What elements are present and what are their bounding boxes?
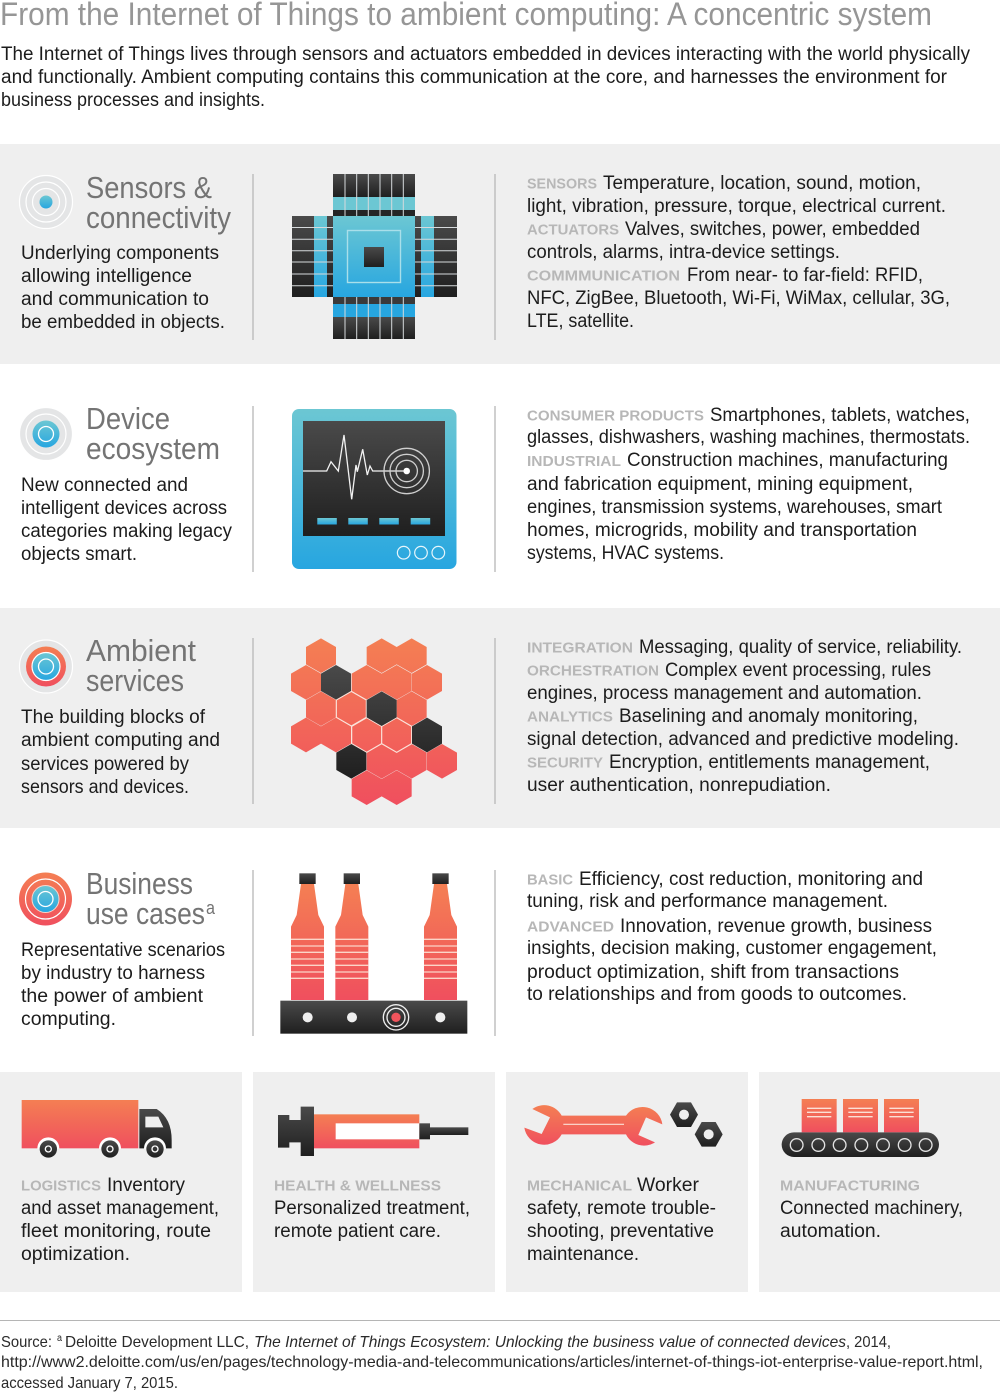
text: logistics: Inventory xyxy=(107,1175,185,1196)
heading: ambient services xyxy=(86,633,196,698)
heading: sensors and connectivity: connectivity xyxy=(86,200,231,235)
heading: business use cases: use cases xyxy=(86,896,205,931)
description: sensors: allowing intelligence xyxy=(21,266,192,287)
heading: ambient services: services xyxy=(86,663,184,698)
details: device: INDUSTRIAL xyxy=(527,454,621,470)
description: device: objects smart. xyxy=(21,544,137,565)
details: business: tuning, risk and performance management. xyxy=(527,891,888,912)
panel: sensors and connectivity xyxy=(0,144,1000,364)
heading: device ecosystem: ecosystem xyxy=(86,431,220,466)
icon: hexagon cluster xyxy=(291,638,457,805)
details: ambient: engines, process management and automation. xyxy=(527,683,922,704)
details: sensors: SENSORS xyxy=(527,176,597,192)
heading: device ecosystem xyxy=(86,401,220,466)
description: device: categories making legacy xyxy=(21,521,232,542)
icon: bottles on conveyor xyxy=(280,873,467,1034)
text: mechanical: maintenance. xyxy=(527,1244,639,1265)
details: ambient: ANALYTICS xyxy=(527,710,613,726)
details: sensors: light, vibration, pressure, torque, electrical current. xyxy=(527,196,946,217)
details: ambient: SECURITY xyxy=(527,756,603,772)
description: sensors: and communication to xyxy=(21,289,209,310)
icon: device rings xyxy=(20,408,72,460)
description: business: the power of ambient xyxy=(21,986,204,1007)
heading: sensors and connectivity: Sensors & xyxy=(86,170,212,205)
icon: microchip xyxy=(292,174,457,339)
heading: device ecosystem: Device xyxy=(86,401,170,436)
icon: syringe xyxy=(278,1107,468,1156)
details: sensors: ACTUATORS xyxy=(527,222,619,238)
details: device: systems, HVAC systems. xyxy=(527,543,724,564)
text: health and wellness: HEALTH & WELLNESS xyxy=(274,1178,441,1194)
heading: sensors and connectivity xyxy=(86,170,231,235)
source footnote: http://www2.deloitte.com/us/en/pages/technology-media-and-telecommunications/articles/internet-of-things-iot-enterprise-value-report.html, xyxy=(1,1354,983,1371)
description: sensors: Underlying components xyxy=(21,243,219,264)
text: logistics: fleet monitoring, route xyxy=(21,1221,211,1242)
details: business: ADVANCED xyxy=(527,920,614,936)
details: ambient: Complex event processing, rules xyxy=(665,660,931,681)
text: logistics xyxy=(21,1175,219,1265)
card: mechanical xyxy=(506,1072,748,1292)
details: sensors: Valves, switches, power, embedded xyxy=(625,219,920,240)
icon: ambient rings xyxy=(20,640,72,693)
details: ambient: Messaging, quality of service, reliability. xyxy=(639,637,962,658)
description: ambient: ambient computing and xyxy=(21,730,220,751)
text: manufacturing: automation. xyxy=(780,1221,881,1242)
source footnote: Deloitte Development LLC, xyxy=(65,1334,249,1351)
details: sensors: COMMMUNICATION xyxy=(527,268,680,284)
details: device: Construction machines, manufacturing xyxy=(627,450,948,471)
text: logistics: optimization. xyxy=(21,1244,130,1265)
card: logistics xyxy=(0,1072,242,1292)
text: logistics: and asset management, xyxy=(21,1198,219,1219)
text: health and wellness: Personalized treatment, xyxy=(274,1198,470,1219)
text: mechanical xyxy=(527,1175,716,1265)
details: ambient: Encryption, entitlements management, xyxy=(609,752,930,773)
details: ambient: signal detection, advanced and predictive modeling. xyxy=(527,729,959,750)
description: ambient xyxy=(21,707,220,798)
details: sensors: NFC, ZigBee, Bluetooth, Wi-Fi, WiMax, cellular, 3G, xyxy=(527,288,950,309)
panel: ambient services xyxy=(0,608,1000,828)
description: business: by industry to harness xyxy=(21,963,205,984)
icon: business rings xyxy=(19,872,72,926)
heading: ambient services: Ambient xyxy=(86,633,196,668)
intro text: The Internet of Things lives through sensors and actuators embedded in devices interacting with the world physically xyxy=(1,44,970,65)
heading: business use cases: Business xyxy=(86,866,193,901)
panel: business use cases xyxy=(0,828,1000,1072)
description: sensors: be embedded in objects. xyxy=(21,312,225,333)
icon: sensor rings xyxy=(20,176,72,228)
details: device: glasses, dishwashers, washing machines, thermostats. xyxy=(527,427,970,448)
details: ambient: user authentication, nonrepudiation. xyxy=(527,775,831,796)
details: device: engines, transmission systems, warehouses, smart xyxy=(527,497,943,518)
details: business: BASIC xyxy=(527,872,574,888)
text: health and wellness xyxy=(274,1178,470,1242)
intro text: and functionally. Ambient computing contains this communication at the core, and harnesses the environment for xyxy=(1,67,948,88)
source footnote: The Internet of Things Ecosystem: Unlocking the business value of connected devices xyxy=(254,1334,846,1351)
source footnote: Source: xyxy=(1,1334,52,1351)
icon: conveyor with boxes xyxy=(782,1099,939,1157)
text: manufacturing: MANUFACTURING xyxy=(780,1178,920,1194)
icon: wrench and nuts xyxy=(524,1102,723,1147)
heading: business use cases xyxy=(86,866,216,931)
description: device: intelligent devices across xyxy=(21,498,227,519)
details: device: Smartphones, tablets, watches, xyxy=(710,405,970,426)
description: device: New connected and xyxy=(21,475,188,496)
source footnote: accessed January 7, 2015. xyxy=(1,1375,178,1392)
text: mechanical: shooting, preventative xyxy=(527,1221,714,1242)
details: sensors: Temperature, location, sound, motion, xyxy=(603,173,921,194)
details: ambient: INTEGRATION xyxy=(527,640,633,656)
description: ambient: services powered by xyxy=(21,754,189,775)
text: mechanical: Worker xyxy=(637,1175,700,1196)
source footnote: a xyxy=(57,1333,62,1344)
details: ambient: ORCHESTRATION xyxy=(527,664,659,680)
details: business: Innovation, revenue growth, business xyxy=(620,916,932,937)
card: manufacturing xyxy=(759,1072,1000,1292)
text: mechanical: safety, remote trouble- xyxy=(527,1198,716,1219)
details: ambient xyxy=(527,637,962,796)
details: sensors: From near- to far-field: RFID, xyxy=(687,265,923,286)
description: business: Representative scenarios xyxy=(21,940,225,961)
description: device xyxy=(21,475,232,565)
description: business xyxy=(21,940,225,1030)
description: ambient: sensors and devices. xyxy=(21,777,189,798)
details: business: product optimization, shift from transactions xyxy=(527,962,899,983)
icon: monitor device xyxy=(292,409,456,569)
source footnote: , 2014, xyxy=(846,1334,891,1351)
details: business: insights, decision making, customer engagement, xyxy=(527,938,937,959)
intro text: business processes and insights. xyxy=(1,90,265,111)
text: mechanical: MECHANICAL xyxy=(527,1178,632,1194)
details: device: CONSUMER PRODUCTS xyxy=(527,408,704,424)
details: business: to relationships and from goods to outcomes. xyxy=(527,984,907,1005)
panel: device ecosystem xyxy=(0,364,1000,608)
details: device: homes, microgrids, mobility and transportation xyxy=(527,520,917,541)
details: device xyxy=(527,405,970,564)
description: sensors xyxy=(21,243,225,333)
description: ambient: The building blocks of xyxy=(21,707,206,728)
details: sensors xyxy=(527,173,950,332)
icon: truck xyxy=(22,1100,172,1162)
details: business: Efficiency, cost reduction, monitoring and xyxy=(579,869,923,890)
text: health and wellness: remote patient care. xyxy=(274,1221,441,1242)
text: logistics: LOGISTICS xyxy=(21,1178,101,1194)
text: manufacturing: Connected machinery, xyxy=(780,1198,963,1219)
intro text xyxy=(1,44,970,111)
details: sensors: LTE, satellite. xyxy=(527,311,634,332)
description: business: computing. xyxy=(21,1009,116,1030)
card: health and wellness xyxy=(253,1072,495,1292)
details: business xyxy=(527,869,937,1005)
heading: business use cases: a xyxy=(206,898,216,918)
text: manufacturing xyxy=(780,1178,963,1242)
details: device: and fabrication equipment, mining equipment, xyxy=(527,474,913,495)
details: sensors: controls, alarms, intra-device settings. xyxy=(527,242,840,263)
details: ambient: Baselining and anomaly monitoring, xyxy=(619,706,918,727)
source footnote xyxy=(1,1333,983,1392)
